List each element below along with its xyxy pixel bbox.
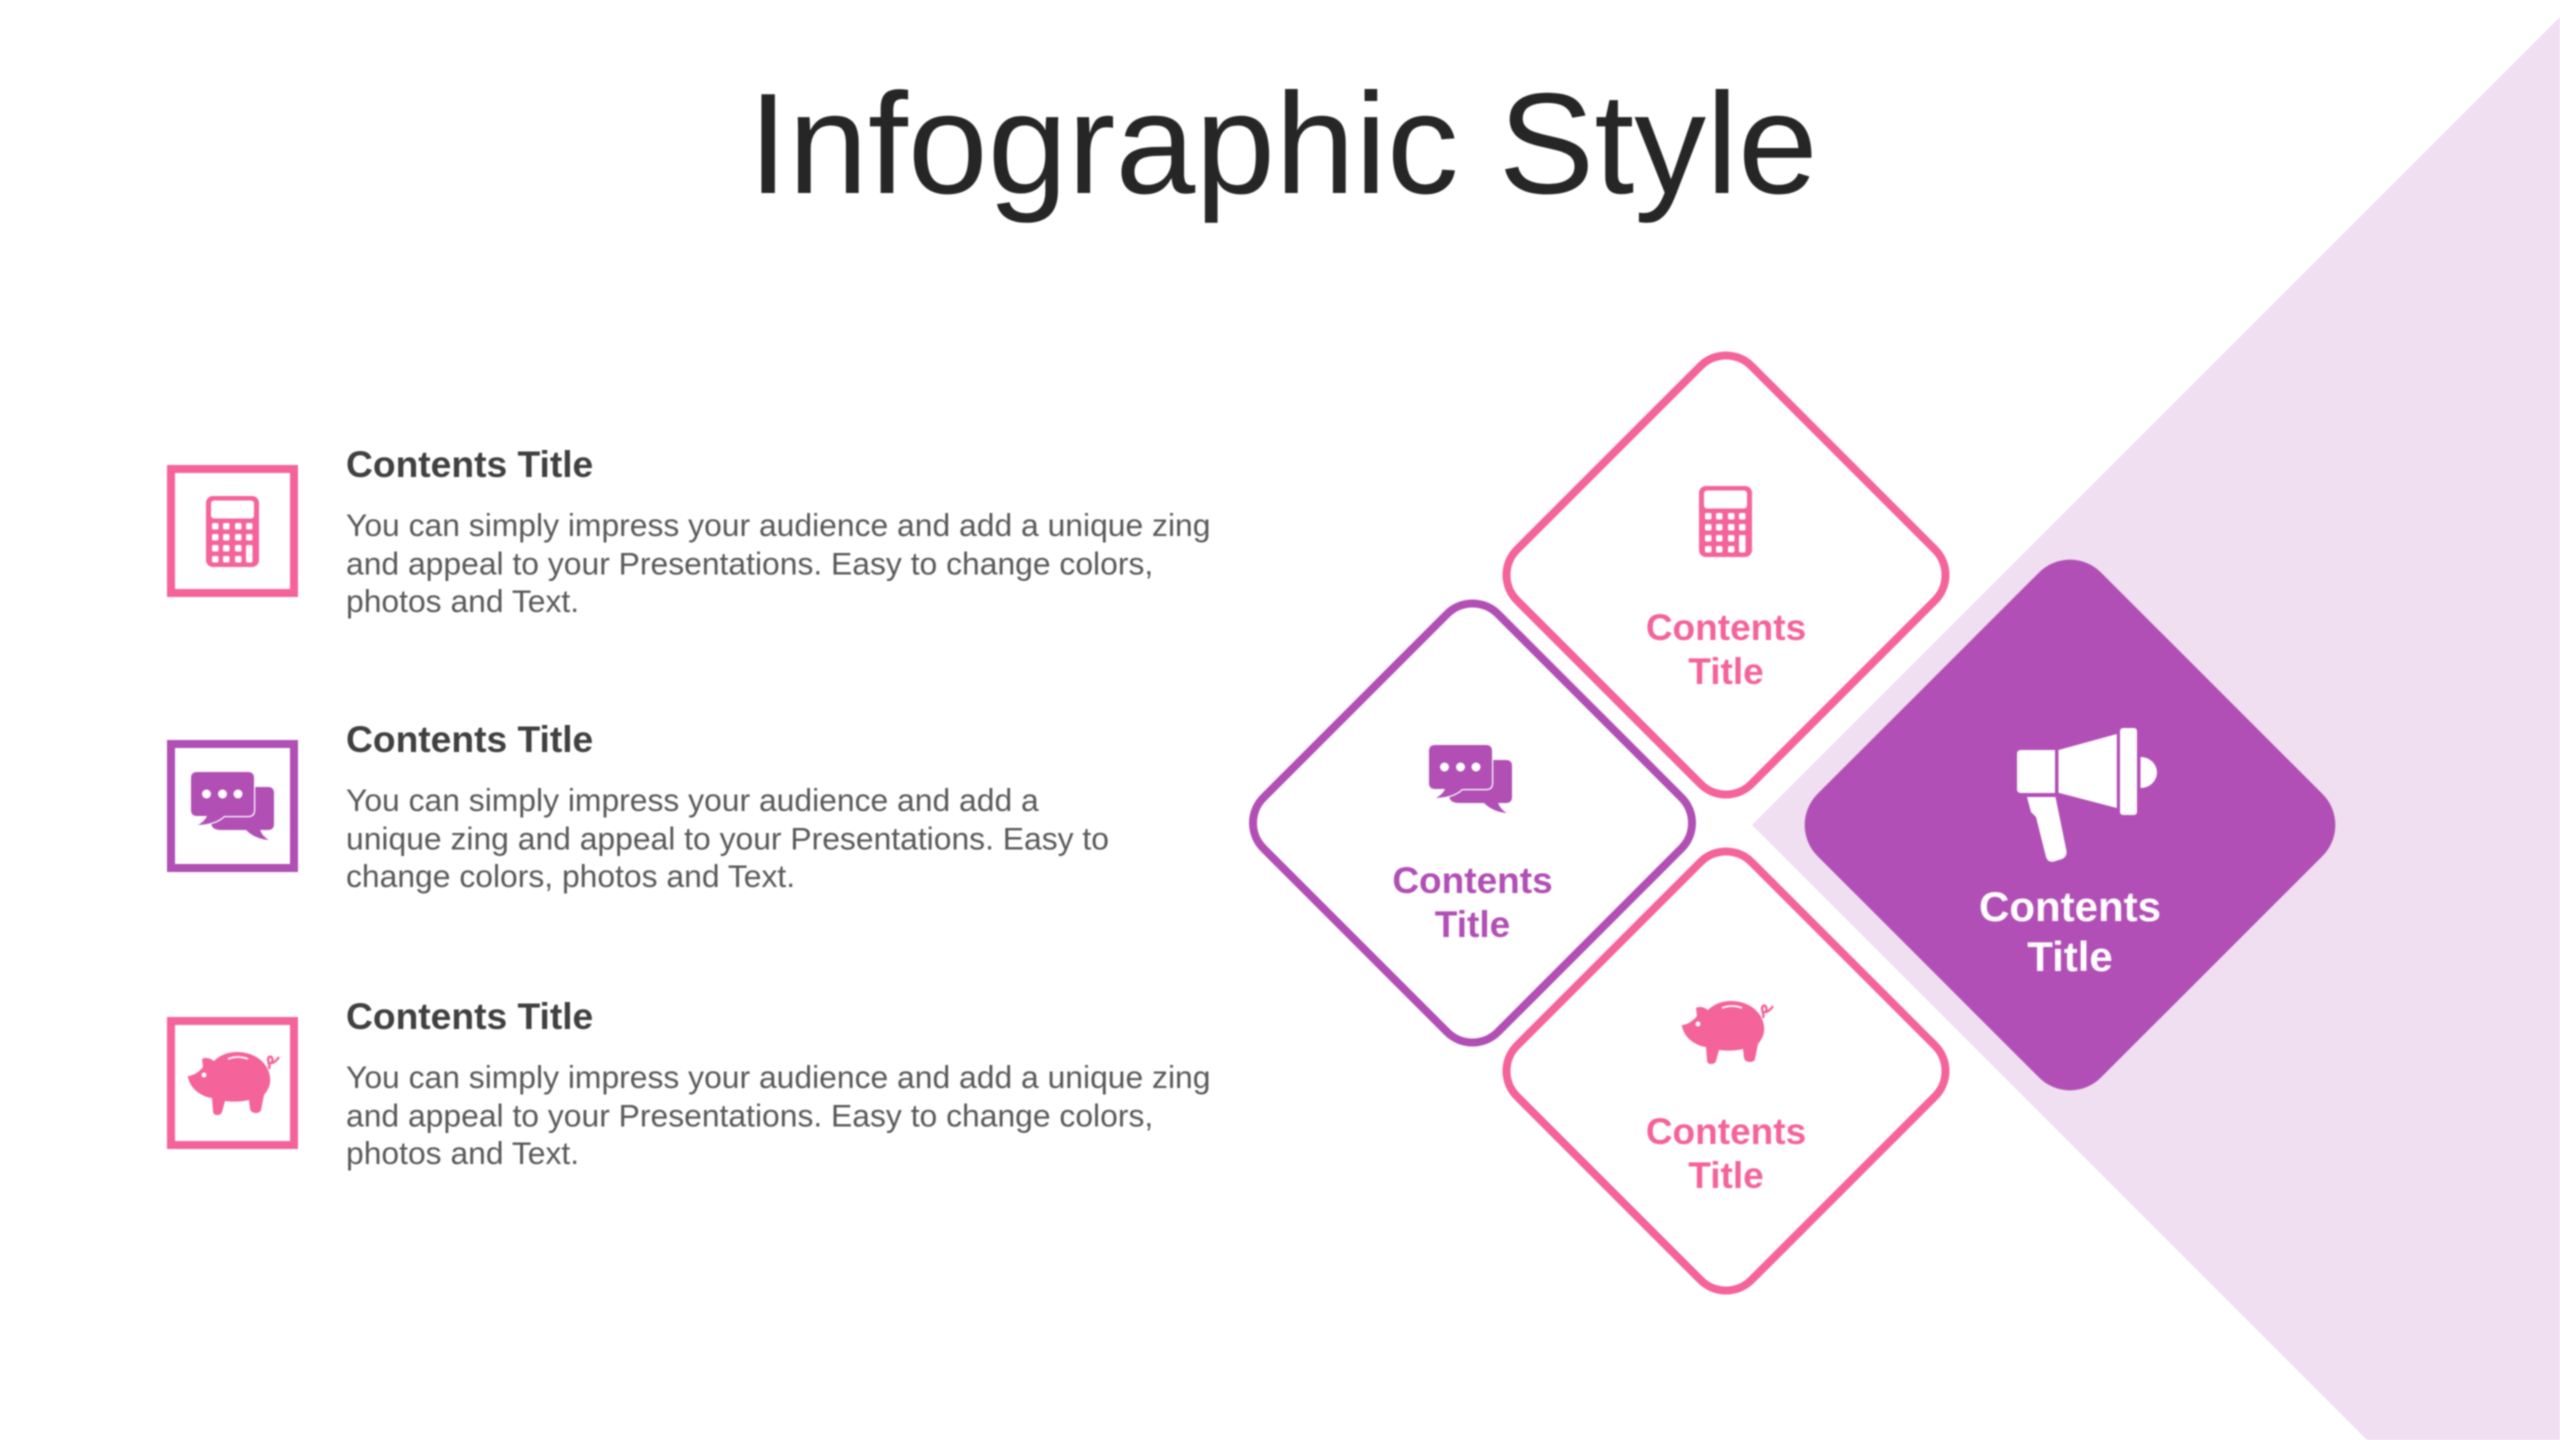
icon box: chat: [171, 744, 294, 868]
diamond: top calculator: [1492, 341, 1960, 809]
panel: list item 1: [171, 443, 1210, 619]
diamond: filled megaphone: Contents: [1979, 883, 2161, 930]
panel: list item 2: [171, 718, 1109, 894]
diamond: bottom piggy bank: Contents: [1646, 1111, 1806, 1152]
item 3 body text: You can simply impress your audience and add a unique zing: [346, 1059, 1210, 1095]
diamond: top calculator: Title: [1688, 651, 1764, 692]
diamond: bottom piggy bank: Title: [1688, 1155, 1764, 1196]
diamond: filled megaphone: [1786, 541, 2354, 1109]
item 2 heading: Contents Title: [346, 718, 593, 760]
item 1 body text: You can simply impress your audience and add a unique zing: [346, 507, 1210, 543]
diamond: left chat: Title: [1435, 904, 1510, 945]
diamond: left chat: [1238, 589, 1707, 1057]
item 2 body text: change colors, photos and Text.: [346, 858, 795, 894]
item 1 heading: Contents Title: [346, 443, 593, 485]
icon box: piggy bank: [171, 1021, 294, 1145]
item 1 body text: and appeal to your Presentations. Easy to change colors,: [346, 546, 1153, 582]
item 3 body text: photos and Text.: [346, 1135, 579, 1171]
diamond: top calculator: Contents: [1646, 607, 1806, 648]
item 1 body text: photos and Text.: [346, 583, 579, 619]
diamond: bottom piggy bank: [1492, 837, 1960, 1305]
icon: megaphone: [2017, 728, 2157, 862]
diamond: left chat: Contents: [1392, 860, 1553, 901]
title: Infographic Style: [748, 64, 1818, 224]
item 3 heading: Contents Title: [346, 995, 593, 1037]
diamond: filled megaphone: Title: [2027, 933, 2113, 980]
background triangle: [1752, 17, 2560, 1440]
item 2 body text: unique zing and appeal to your Presentations. Easy to: [346, 820, 1109, 856]
icon box: calculator: [171, 469, 294, 593]
item 2 body text: You can simply impress your audience and add a: [346, 782, 1039, 818]
item 3 body text: and appeal to your Presentations. Easy to change colors,: [346, 1098, 1153, 1134]
panel: list item 3: [171, 995, 1210, 1171]
